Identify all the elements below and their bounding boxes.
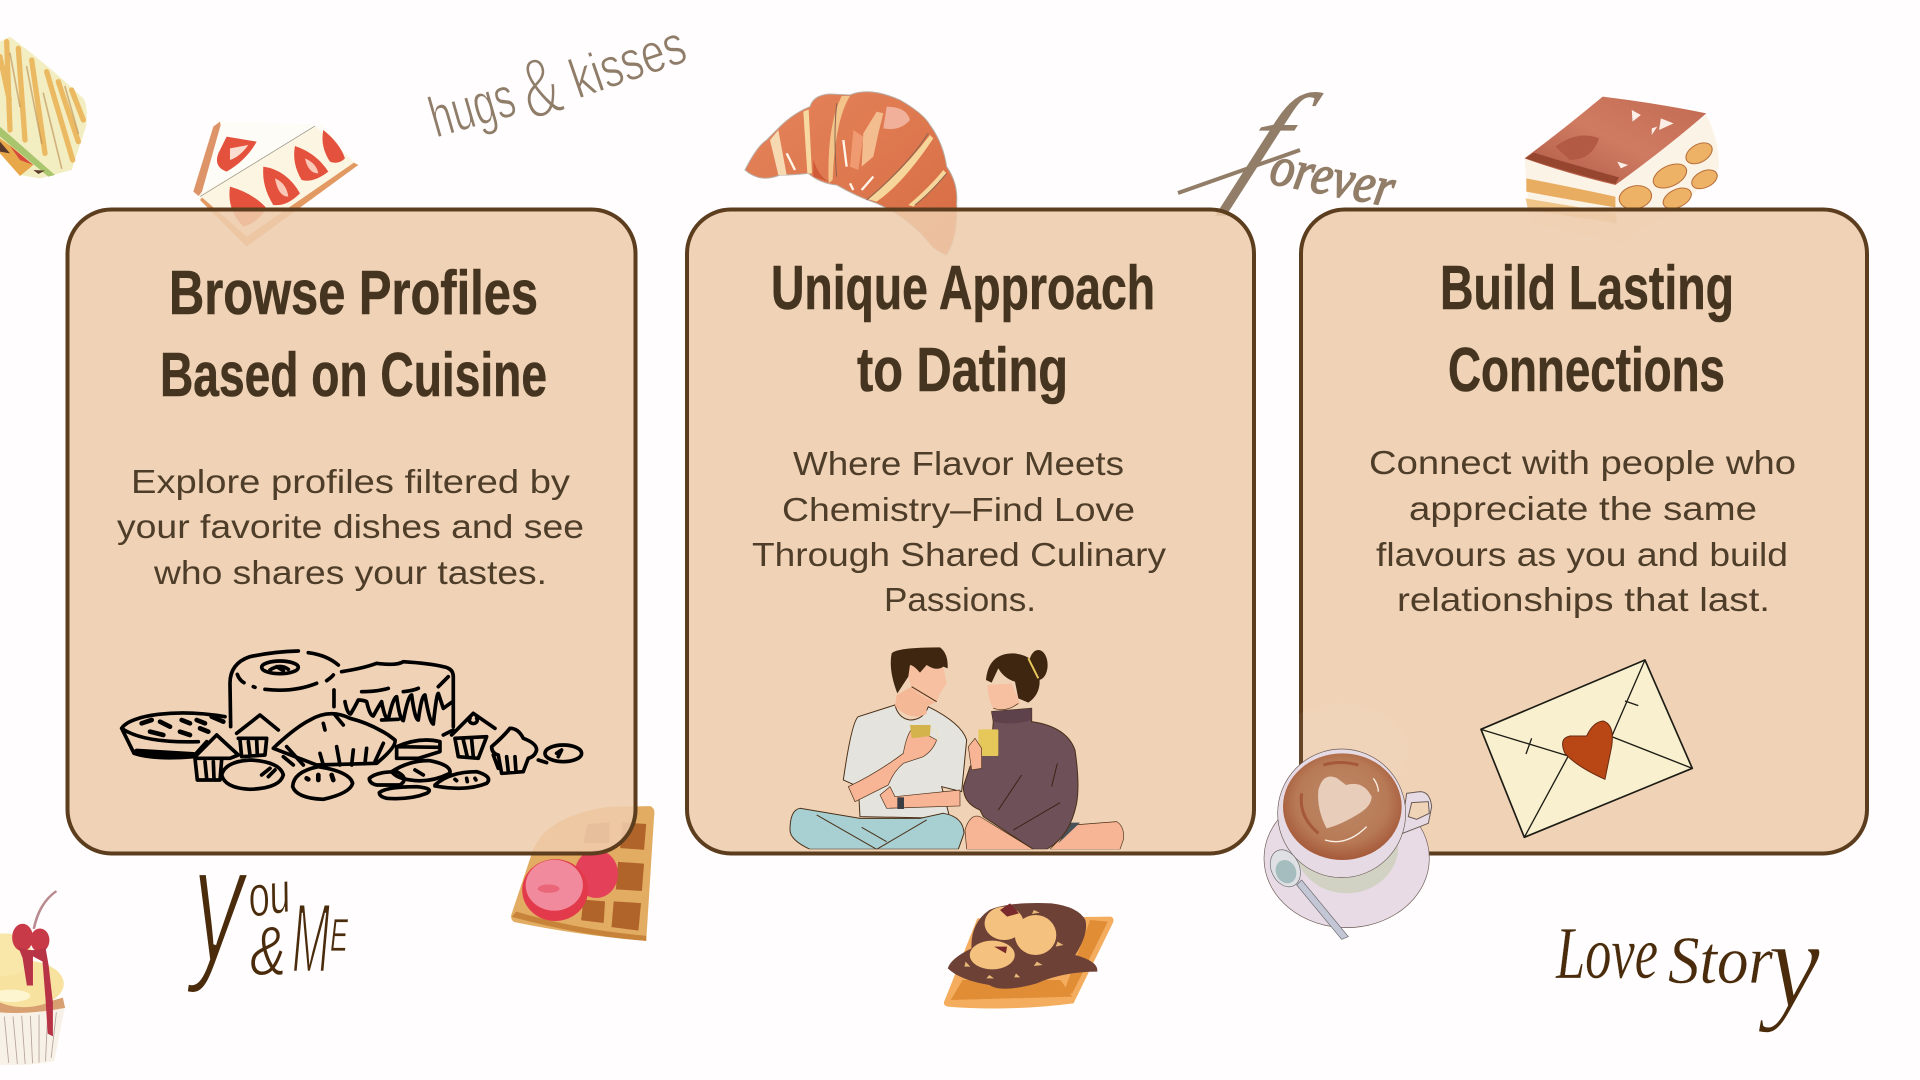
figure: woman	[963, 650, 1124, 849]
text: browse description	[117, 463, 584, 591]
icon: grilled sandwich	[0, 37, 87, 178]
text: forever	[1178, 66, 1400, 220]
text: you & me: M	[292, 883, 330, 993]
icon: cherry cupcake	[0, 891, 65, 1065]
text: unique approach description	[752, 445, 1167, 618]
heading: build lasting connections: Connections	[1448, 336, 1725, 405]
icon: banana chocolate waffle	[944, 903, 1114, 1009]
text: connections description: appreciate the same	[1409, 490, 1757, 527]
icon: tiramisu	[1525, 97, 1721, 243]
heading: browse profiles: Browse Profiles	[169, 259, 538, 328]
heading: build lasting connections	[1440, 254, 1734, 405]
icon: desserts line art	[122, 651, 582, 799]
text: forever: f	[1213, 66, 1336, 216]
heading: build lasting connections: Build Lasting	[1440, 254, 1734, 323]
text: unique approach description: Passions.	[884, 581, 1036, 618]
text: love story	[1555, 896, 1820, 1034]
icon: love letter envelope	[1481, 660, 1692, 837]
text: love story: Stor	[1668, 922, 1773, 998]
text: love story: Love	[1555, 913, 1658, 995]
text: browse description: who shares your tastes.	[153, 554, 547, 591]
text: hugs & kisses: kisses	[561, 12, 693, 110]
heading: unique approach: Unique Approach	[771, 254, 1155, 323]
text: you & me: &	[250, 912, 286, 990]
icon: strawberry waffle	[511, 806, 654, 941]
text: unique approach description: Chemistry–Find Love	[782, 491, 1135, 528]
text: you & me: y	[186, 811, 249, 995]
text: hugs & kisses: &	[509, 36, 571, 137]
heading: browse profiles	[160, 259, 547, 410]
heading: browse profiles: Based on Cuisine	[160, 341, 547, 410]
text: you & me: E	[330, 909, 349, 961]
text: love story: y	[1758, 896, 1820, 1034]
heading: unique approach	[771, 254, 1155, 405]
panel: build lasting connections	[1301, 210, 1867, 854]
text: connections description: relationships that last.	[1397, 581, 1770, 618]
icon: croissant	[745, 92, 957, 255]
text: connections description: flavours as you and build	[1376, 536, 1788, 573]
icon: coffee cup with saucer	[1264, 703, 1432, 939]
figure: man	[790, 647, 967, 849]
panel: unique approach	[687, 210, 1254, 854]
text: you & me: ou	[244, 860, 294, 930]
text: connections description: Connect with people who	[1369, 444, 1796, 481]
text: hugs & kisses: hugs	[422, 64, 522, 150]
text: connections description	[1369, 444, 1796, 618]
text: browse description: Explore profiles filtered by	[131, 463, 571, 500]
text: browse description: your favorite dishes and see	[117, 508, 584, 545]
heading: unique approach: to Dating	[857, 336, 1068, 405]
text: unique approach description: Through Shared Culinary	[752, 536, 1167, 573]
text: hugs & kisses	[422, 12, 693, 150]
text: you & me	[186, 811, 349, 995]
icon: strawberry sandwich	[193, 122, 358, 247]
panel: browse profiles	[68, 210, 636, 854]
illustration: couple with coffee	[790, 647, 1124, 849]
text: forever: orever	[1266, 135, 1400, 220]
text: unique approach description: Where Flavor Meets	[793, 445, 1124, 482]
